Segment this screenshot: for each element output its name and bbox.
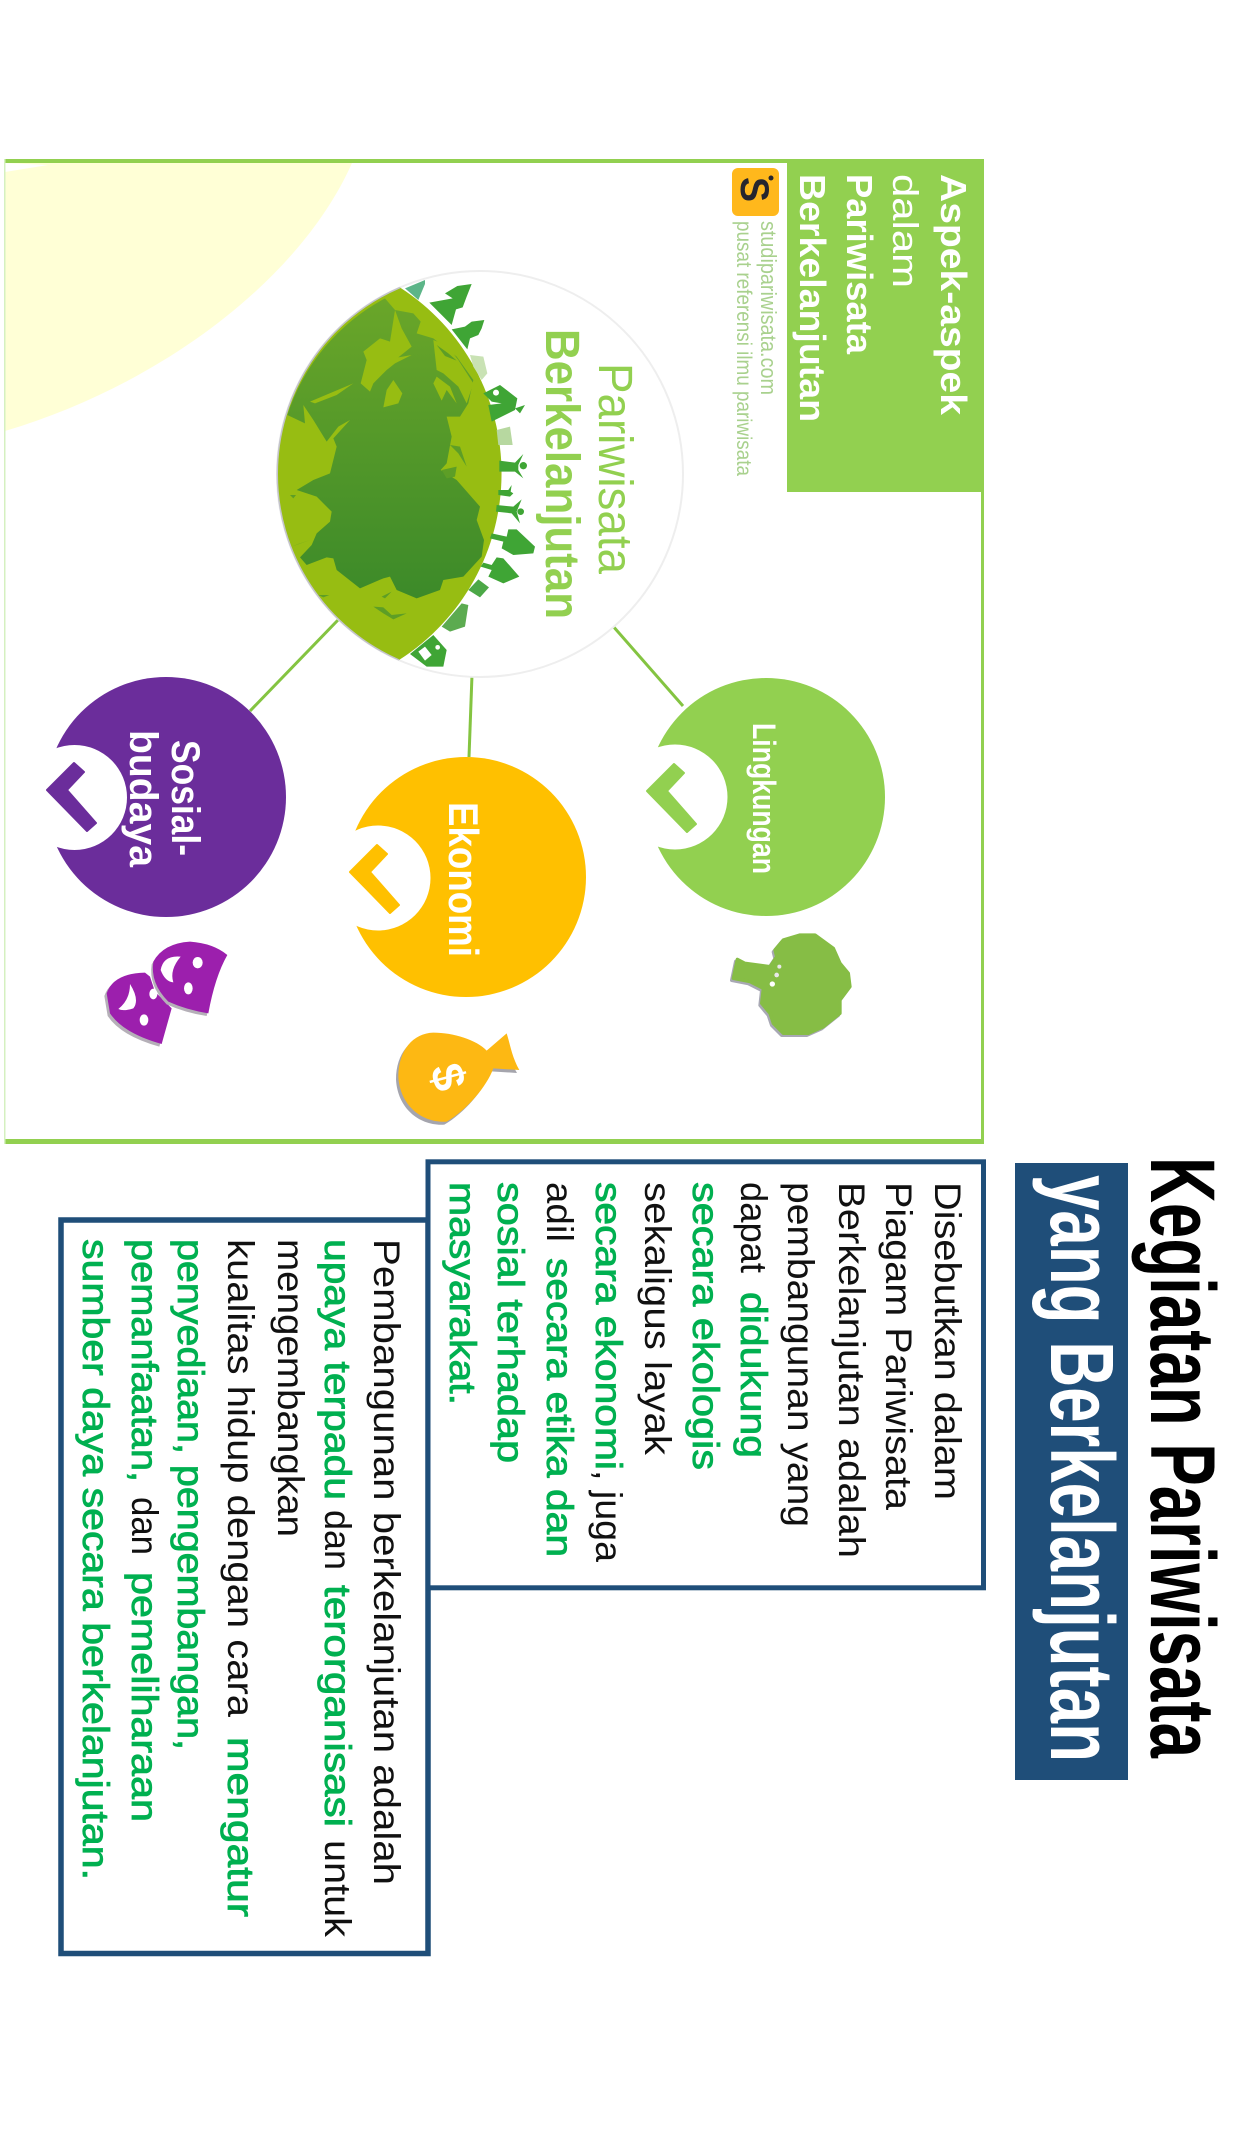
circle: ekonomi <box>326 757 586 997</box>
circle: sosial-budaya: Sosial- <box>163 740 207 856</box>
text box 2: pembangunan berkelanjutan: mengatur <box>220 1737 261 1917</box>
header text <box>792 174 974 422</box>
text box 2: pembangunan berkelanjutan: kualitas hidup dengan cara <box>220 1239 261 1717</box>
continents <box>287 298 484 598</box>
text box 1: piagam pariwisata berkelanjutan: , juga <box>588 1470 629 1562</box>
circle: sosial-budaya <box>22 677 286 917</box>
text box 1: piagam pariwisata berkelanjutan <box>428 1162 984 1588</box>
text box 1: piagam pariwisata berkelanjutan: Disebutkan dalam <box>927 1182 968 1500</box>
text box 2: pembangunan berkelanjutan: pemeliharaan <box>124 1572 165 1822</box>
logo: studipariwisata: studipariwisata.com <box>756 221 781 395</box>
text box 1: piagam pariwisata berkelanjutan: adil <box>539 1182 580 1242</box>
text box 1: piagam pariwisata berkelanjutan: secara ekonomi <box>588 1182 629 1470</box>
dollar sign: $ <box>420 1058 477 1096</box>
panel: aspek-aspek diagram <box>4 159 984 1144</box>
text box 1: piagam pariwisata berkelanjutan: masyarakat. <box>442 1182 483 1405</box>
circle: lingkungan <box>622 678 885 916</box>
text box 2: pembangunan berkelanjutan: penyediaan, pengembangan, <box>170 1239 211 1750</box>
header block <box>787 159 984 492</box>
text box 2: pembangunan berkelanjutan <box>61 1220 428 1954</box>
header text: dalam <box>885 174 926 288</box>
text box 1: piagam pariwisata berkelanjutan: sosial terhadap <box>490 1182 531 1463</box>
icons on globe horizon <box>410 284 535 667</box>
label: berkelanjutan: Berkelanjutan <box>535 329 588 619</box>
connector lines <box>250 620 683 757</box>
text box 2: pembangunan berkelanjutan: upaya terpadu <box>317 1239 358 1500</box>
icon: money bag <box>396 1033 519 1125</box>
header text: Aspek-aspek <box>933 174 974 416</box>
text box 1: piagam pariwisata berkelanjutan: secara etika dan <box>539 1258 580 1557</box>
text box 2: pembangunan berkelanjutan: mengembangkan <box>270 1239 311 1537</box>
text box 1: piagam pariwisata berkelanjutan: Piagam Pariwisata <box>878 1182 919 1510</box>
text box 2: pembangunan berkelanjutan: dan <box>317 1510 358 1570</box>
central circle: pariwisata berkelanjutan <box>277 271 683 677</box>
title <box>1015 1157 1233 1780</box>
globe <box>277 280 535 667</box>
logo: studipariwisata: pusat referensi ilmu pariwisata <box>732 221 755 476</box>
text box 1: piagam pariwisata berkelanjutan: dapat <box>733 1182 774 1274</box>
decorative yellow blob <box>5 163 352 431</box>
title: Kegiatan Pariwisata <box>1131 1157 1233 1759</box>
text box 2: pembangunan berkelanjutan: sumber daya secara berkelanjutan. <box>75 1239 116 1880</box>
text box 1: piagam pariwisata berkelanjutan: secara ekologis <box>685 1182 726 1470</box>
text box 2: pembangunan berkelanjutan: Pembangunan berkelanjutan adalah <box>366 1239 407 1885</box>
circle: lingkungan: Lingkungan <box>746 723 782 874</box>
text box 1: piagam pariwisata berkelanjutan: Berkelanjutan adalah <box>831 1182 872 1558</box>
text box 1: piagam pariwisata berkelanjutan: sekaligus layak <box>637 1182 678 1456</box>
circle: ekonomi: Ekonomi <box>440 802 487 957</box>
label: pariwisata: Pariwisata <box>588 363 641 574</box>
text box 2: pembangunan berkelanjutan: untuk <box>317 1840 358 1938</box>
logo: studipariwisata <box>732 168 781 476</box>
header text: Pariwisata <box>839 174 880 355</box>
text box 2: pembangunan berkelanjutan: terorganisasi <box>317 1585 358 1827</box>
icon: theatre masks <box>104 942 227 1047</box>
title: yang Berkelanjutan <box>1031 1175 1131 1762</box>
title bar <box>1015 1163 1128 1780</box>
text box 2: pembangunan berkelanjutan: dan <box>124 1497 165 1555</box>
text box 2: pembangunan berkelanjutan: pemanfaatan, <box>124 1239 165 1482</box>
header text: Berkelanjutan <box>792 174 833 422</box>
icon: tree <box>732 935 850 1035</box>
circle: sosial-budaya: budaya <box>121 730 165 868</box>
text box 1: piagam pariwisata berkelanjutan: pembangunan yang <box>780 1182 821 1527</box>
text box 1: piagam pariwisata berkelanjutan: didukung <box>733 1292 774 1458</box>
logo: studipariwisata: S <box>732 177 776 202</box>
land details <box>310 310 473 407</box>
